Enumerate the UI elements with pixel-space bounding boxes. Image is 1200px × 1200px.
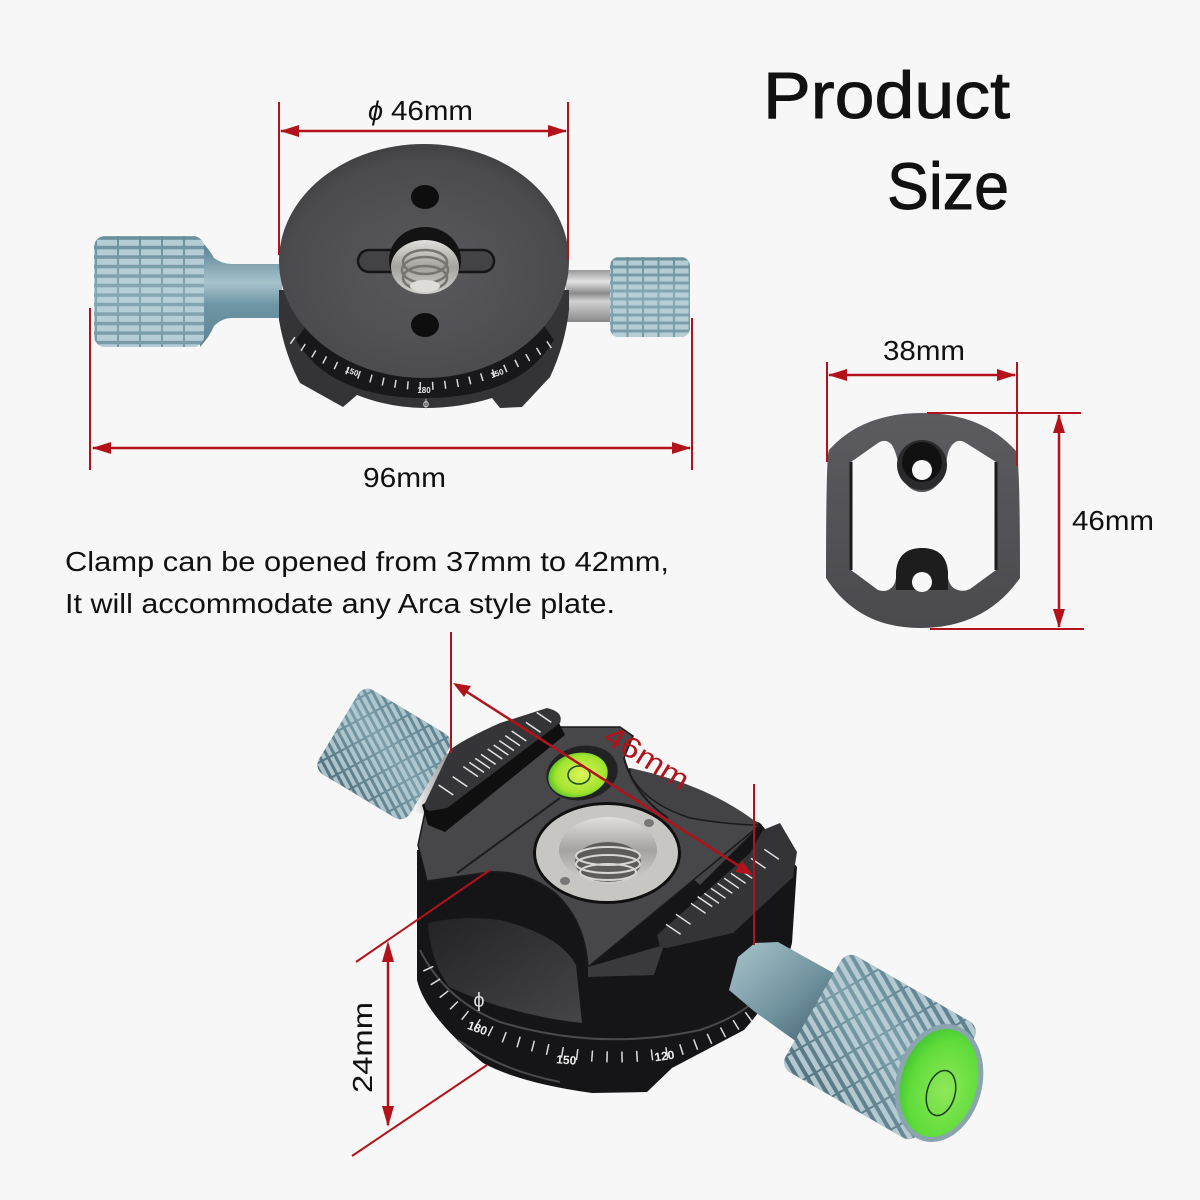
upper screw seat — [897, 440, 947, 490]
description text: It will accommodate any Arca style plate. — [65, 588, 615, 619]
product: top view of clamp — [94, 144, 690, 410]
right angled knob — [729, 942, 996, 1152]
right jaw ticks — [666, 849, 779, 934]
dimension: 46mm angled — [451, 632, 754, 945]
right jaw — [657, 823, 797, 948]
plate groove — [457, 758, 668, 873]
mount ring — [533, 802, 681, 904]
scale ticks — [292, 340, 556, 386]
plate inner dark edges — [851, 462, 996, 570]
top plate — [418, 727, 760, 967]
plate lower tab — [588, 945, 664, 977]
description text — [65, 546, 669, 619]
left knob — [94, 236, 282, 347]
description text: Clamp can be opened from 37mm to 42mm, — [65, 546, 669, 577]
left angled knob — [313, 685, 455, 823]
slot — [358, 250, 494, 272]
scale labels — [344, 365, 505, 410]
lower screw seat — [896, 548, 948, 592]
upper jaw ticks — [439, 712, 551, 795]
right knob — [566, 257, 690, 337]
screw holes — [411, 185, 439, 337]
dimension: 96mm width: 96mm — [363, 462, 446, 493]
scale labels: 180 — [417, 386, 431, 395]
dimension: 24mm height: 24mm — [347, 1002, 378, 1093]
bubble level small — [541, 739, 623, 807]
dimension: 38mm plate width — [827, 335, 1017, 466]
dimension: 46mm plate height: 46mm — [1072, 505, 1154, 536]
disc surface right — [630, 768, 760, 885]
clamp body — [417, 768, 797, 1093]
product: angled view of clamp — [313, 685, 996, 1152]
dimension: 38mm plate width: 38mm — [883, 335, 965, 366]
title: Size — [887, 149, 1009, 223]
scale labels: ϕ — [423, 398, 429, 410]
dimension: 46mm angled: 46mm — [598, 720, 695, 797]
title — [763, 58, 1010, 223]
rotation scale ring — [296, 320, 554, 398]
dimension: 46mm diameter — [279, 95, 568, 260]
dimension: 46mm diameter: ϕ — [368, 96, 383, 126]
dimension: 96mm width — [90, 308, 692, 493]
round top plate — [279, 144, 569, 378]
scale labels: 150 — [344, 365, 360, 378]
scale labels: 150 — [489, 367, 505, 380]
dimension: 46mm plate height — [927, 413, 1154, 629]
angle scale labels: 120 — [654, 1048, 676, 1064]
title: Product — [763, 58, 1010, 132]
scale ring highlight — [420, 950, 750, 1082]
angle scale labels — [466, 990, 676, 1068]
recessed disc — [428, 918, 582, 1023]
dimension: 24mm height — [347, 870, 490, 1156]
angle scale labels: 150 — [556, 1052, 577, 1068]
angle scale labels: 180 — [466, 1018, 489, 1038]
screw thread — [389, 227, 461, 294]
dimension: 46mm diameter: 46mm — [391, 95, 473, 126]
product: quick release plate — [826, 413, 1020, 628]
clamp body — [279, 290, 569, 408]
angle scale labels: ϕ — [473, 990, 485, 1012]
upper jaw — [425, 708, 561, 811]
upper jaw shadow — [422, 715, 565, 832]
scale ticks — [428, 968, 762, 1057]
